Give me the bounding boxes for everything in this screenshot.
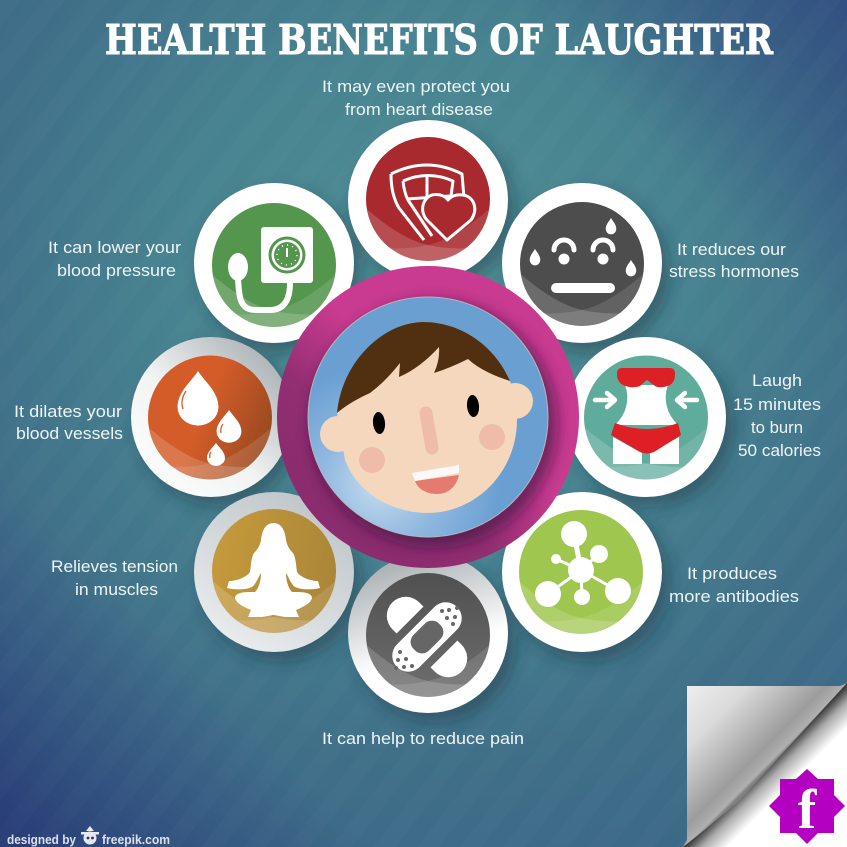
icon: meditating woman [227,523,320,617]
label: stress: stress hormones [669,262,799,281]
benefit: reduce pain [348,553,508,713]
icon: crossed bandages [379,589,475,685]
page curl [683,683,847,847]
label: stress [669,240,799,281]
central portrait [277,266,579,568]
label: blood vessels: blood vessels [16,424,123,443]
icon: antibody molecule [535,521,631,607]
label: calories: Laugh [752,371,802,390]
magenta ring [277,266,579,568]
label: heart disease [322,77,510,119]
benefit: stress hormones [502,183,662,343]
blue disc [308,297,548,537]
face [320,322,533,513]
label: blood vessels [14,402,123,443]
label: blood pressure: It can lower your [48,238,181,257]
icon: freepik mascot [81,826,99,844]
benefit: blood pressure [194,183,354,343]
label: calories: 15 minutes [733,395,821,414]
benefit: muscle tension [194,492,354,652]
ring inner shadow [310,300,558,548]
credit: designed by [7,833,76,847]
circle shadows [139,130,734,723]
benefit: antibodies [502,492,662,652]
icon: waist with bikini [595,368,697,464]
label: blood vessels: It dilates your [14,402,122,421]
label: muscles [51,557,178,599]
label: blood pressure [48,238,181,280]
label: muscles: Relieves tension [51,557,178,576]
icon: shield and heart [391,165,475,240]
icon: blood pressure monitor [228,227,313,310]
label: antibodies: more antibodies [669,587,799,606]
logo badge [769,769,845,844]
hair [337,322,510,413]
benefit: blood vessels [131,337,291,497]
label: blood pressure: blood pressure [57,261,176,280]
label: calories [733,371,821,460]
credit: freepik.com [102,833,170,847]
label: stress: It reduces our [677,240,786,259]
label: calories: to burn [751,418,803,437]
label: calories: 50 calories [738,441,821,460]
label: heart disease: from heart disease [345,100,493,119]
label: antibodies: It produces [687,564,777,583]
label: pain: It can help to reduce pain [322,729,524,748]
label: antibodies [669,564,799,606]
benefit: heart disease [348,120,508,280]
credit [7,826,170,847]
icon: water drops [178,371,241,466]
icon: sweating face [530,218,636,293]
logo badge: f [798,779,818,841]
benefit: burn calories [566,337,726,497]
label: heart disease: It may even protect you [322,77,510,96]
label: muscles: in muscles [75,580,158,599]
